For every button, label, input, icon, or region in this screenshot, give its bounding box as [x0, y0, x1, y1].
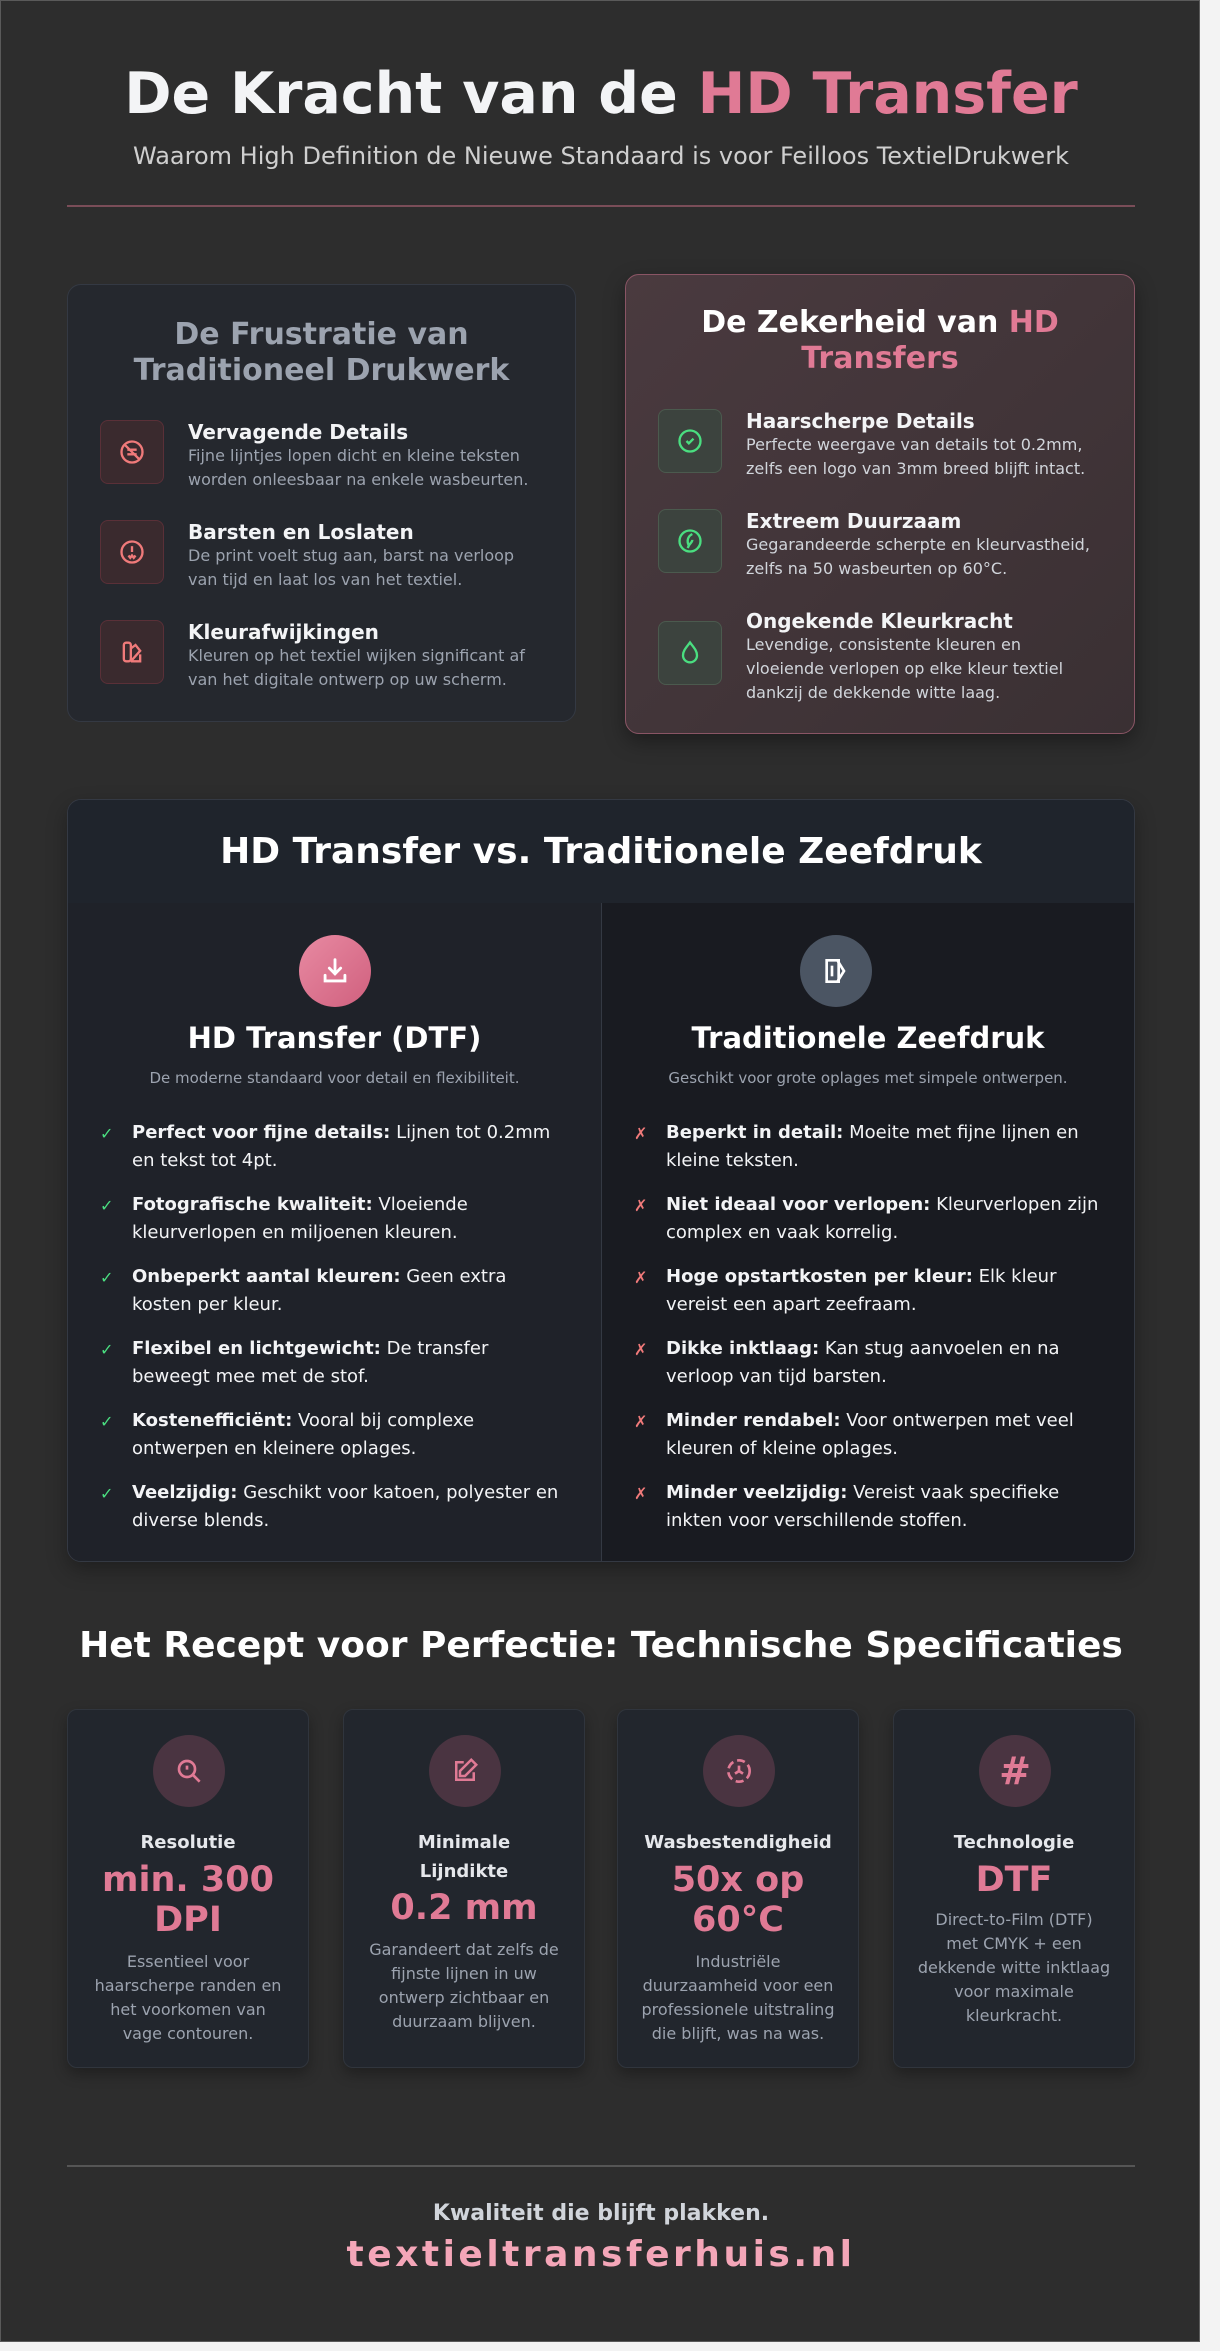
- spec card: resolutie: het voorkomen van: [110, 2000, 266, 2019]
- footer tagline: Kwaliteit die blijft plakken.: [433, 2201, 769, 2226]
- item: vervagende details: Fijne lijntjes lopen dicht en kleine teksten: [188, 446, 520, 465]
- spec card: resolutie: min. 300: [102, 1860, 274, 1900]
- item: barsten: [100, 520, 514, 589]
- cons list: Minder veelzijdig: Vereist vaak specifieke: [666, 1482, 1059, 1503]
- pros list: ontwerpen en kleinere oplages.: [132, 1438, 416, 1459]
- pros list: Flexibel en lichtgewicht: De transfer: [132, 1338, 488, 1359]
- cons list: [634, 1122, 1098, 1531]
- spec card: technologie: voor maximale: [954, 1982, 1074, 2001]
- pros list: Perfect voor fijne details: Lijnen tot 0.2mm: [132, 1122, 550, 1143]
- item: barsten: Barsten en Loslaten: [188, 520, 414, 544]
- comparison heading: [68, 800, 1134, 903]
- cons list: Niet ideaal voor verlopen: Kleurverlopen zijn: [666, 1194, 1098, 1215]
- item: duurzaam: zelfs na 50 wasbeurten op 60°C.: [746, 559, 1007, 578]
- pros list: ✓: [100, 1340, 113, 1359]
- spec card: wasbestendigheid: duurzaamheid voor een: [643, 1976, 833, 1995]
- pros list: [100, 1122, 558, 1531]
- pros list: Veelzijdig: Geschikt voor katoen, polyester en: [132, 1482, 558, 1503]
- cons list: complex en vaak korrelig.: [666, 1222, 898, 1243]
- column title: Traditionele Zeefdruk: [692, 1021, 1044, 1055]
- item: kleurkracht: Ongekende Kleurkracht: [746, 609, 1013, 633]
- item: haarscherp: Perfecte weergave van details tot 0.2mm,: [746, 435, 1082, 454]
- item: vervagende details: [100, 420, 528, 489]
- item: barsten: van tijd en laat los van het textiel.: [188, 570, 462, 589]
- cons list: vereist een apart zeefraam.: [666, 1294, 917, 1315]
- icon: wash cycle: [703, 1735, 775, 1807]
- item: duurzaam: Gegarandeerde scherpte en kleurvastheid,: [746, 535, 1090, 554]
- spec card: wasbestendigheid: professionele uitstraling: [642, 2000, 834, 2019]
- spec card: lijndikte: ontwerp zichtbaar en: [379, 1988, 549, 2007]
- spec card: wasbestendigheid: Wasbestendigheid: [644, 1832, 832, 1853]
- spec card: resolutie: Essentieel voor: [127, 1952, 249, 1971]
- column subtitle: Geschikt voor grote oplages met simpele ontwerpen.: [668, 1069, 1068, 1087]
- cons list: verloop van tijd barsten.: [666, 1366, 887, 1387]
- cons list: Minder rendabel: Voor ontwerpen met veel: [666, 1410, 1074, 1431]
- subtitle: Waarom High Definition de Nieuwe Standaard is voor Feilloos TextielDrukwerk: [133, 142, 1069, 170]
- footer url: textieltransferhuis.nl: [347, 2234, 855, 2275]
- item: kleurkracht: dankzij de dekkende witte laag.: [746, 683, 1000, 702]
- pros list: ✓: [100, 1124, 113, 1143]
- cons list: Dikke inktlaag: Kan stug aanvoelen en na: [666, 1338, 1060, 1359]
- title: De Kracht van de HD Transfer: [124, 61, 1078, 127]
- item: duurzaam: Extreem Duurzaam: [746, 509, 961, 533]
- panel: frustration: [67, 284, 576, 722]
- pros list: diverse blends.: [132, 1510, 269, 1531]
- spec card: lijndikte: Garandeert dat zelfs de: [369, 1940, 559, 1959]
- icon: pencil: [429, 1735, 501, 1807]
- spec card: lijndikte: duurzaam blijven.: [392, 2012, 536, 2031]
- pros list: ✓: [100, 1196, 113, 1215]
- panel heading: Traditioneel Drukwerk: [134, 353, 509, 388]
- item: haarscherp: zelfs een logo van 3mm breed blijft intact.: [746, 459, 1085, 478]
- item: haarscherp: [658, 409, 1085, 478]
- spec card: lijndikte: Lijndikte: [420, 1861, 508, 1882]
- item: kleurkracht: vloeiende verlopen op elke kleur textiel: [746, 659, 1063, 678]
- icon: drop: [658, 621, 722, 685]
- pros list: kosten per kleur.: [132, 1294, 282, 1315]
- comparison heading: HD Transfer vs. Traditionele Zeefdruk: [220, 831, 982, 872]
- icon: swatch: [100, 620, 164, 684]
- pros list: Onbeperkt aantal kleuren: Geen extra: [132, 1266, 506, 1287]
- icon: check circle: [658, 409, 722, 473]
- spec card: technologie: Technologie: [954, 1832, 1074, 1853]
- spec card: wasbestendigheid: die blijft, was na was.: [652, 2024, 824, 2043]
- cons list: ✗: [634, 1412, 647, 1431]
- pros list: Fotografische kwaliteit: Vloeiende: [132, 1194, 468, 1215]
- panel: certainty: [625, 274, 1135, 734]
- icon: leaf: [658, 509, 722, 573]
- spec card: technologie: Direct-to-Film (DTF): [935, 1910, 1093, 1929]
- spec card: technologie: [893, 1709, 1135, 2068]
- spec card: lijndikte: fijnste lijnen in uw: [391, 1964, 537, 1983]
- spec card: wasbestendigheid: [617, 1709, 859, 2068]
- specs heading: Het Recept voor Perfectie: Technische Specificaties: [79, 1625, 1123, 1666]
- spec card: lijndikte: 0.2 mm: [390, 1888, 538, 1928]
- item: kleurafwijkingen: Kleuren op het textiel wijken significant af: [188, 646, 525, 665]
- cons list: inkten voor verschillende stoffen.: [666, 1510, 967, 1531]
- item: kleurkracht: [658, 609, 1063, 702]
- panel heading: De Zekerheid van HD: [701, 305, 1059, 340]
- column: HD transfer: [68, 903, 601, 1561]
- spec card: lijndikte: [343, 1709, 585, 2068]
- cons list: ✗: [634, 1124, 647, 1143]
- column subtitle: De moderne standaard voor detail en flexibiliteit.: [150, 1069, 520, 1087]
- cons list: ✗: [634, 1484, 647, 1503]
- item: kleurkracht: Levendige, consistente kleuren en: [746, 635, 1021, 654]
- cons list: ✗: [634, 1268, 647, 1287]
- cons list: Beperkt in detail: Moeite met fijne lijnen en: [666, 1122, 1079, 1143]
- icon: hash: #: [999, 1749, 1031, 1793]
- spec card: resolutie: [67, 1709, 309, 2068]
- column: zeefdruk: [601, 903, 1134, 1561]
- panel: comparison: [67, 799, 1135, 1562]
- spec card: wasbestendigheid: 50x op: [672, 1860, 804, 1900]
- icon: crack: [100, 520, 164, 584]
- spec card: resolutie: DPI: [154, 1900, 222, 1940]
- pros list: ✓: [100, 1412, 113, 1431]
- cons list: ✗: [634, 1196, 647, 1215]
- icon: blurred: [100, 420, 164, 484]
- pros list: Kostenefficiënt: Vooral bij complexe: [132, 1410, 474, 1431]
- item: vervagende details: worden onleesbaar na enkele wasbeurten.: [188, 470, 528, 489]
- item: barsten: De print voelt stug aan, barst na verloop: [188, 546, 514, 565]
- pros list: kleurverlopen en miljoenen kleuren.: [132, 1222, 458, 1243]
- item: duurzaam: [658, 509, 1090, 578]
- panel heading: [701, 305, 1059, 376]
- spec card: wasbestendigheid: 60°C: [692, 1900, 784, 1940]
- spec card: technologie: DTF: [976, 1860, 1052, 1900]
- pros list: ✓: [100, 1268, 113, 1287]
- spec card: resolutie: Resolutie: [140, 1832, 236, 1853]
- icon: hash: [979, 1735, 1051, 1807]
- icon: magnifier: [153, 1735, 225, 1807]
- item: vervagende details: Vervagende Details: [188, 420, 408, 444]
- panel heading: De Frustratie van: [174, 317, 469, 352]
- item: haarscherp: Haarscherpe Details: [746, 409, 975, 433]
- cons list: Hoge opstartkosten per kleur: Elk kleur: [666, 1266, 1056, 1287]
- item: kleurafwijkingen: van het digitale ontwerp op uw scherm.: [188, 670, 507, 689]
- panel heading: Transfers: [801, 341, 959, 376]
- pros list: en tekst tot 4pt.: [132, 1150, 277, 1171]
- panel heading: [134, 317, 510, 388]
- spec card: wasbestendigheid: Industriële: [696, 1952, 780, 1971]
- cons list: ✗: [634, 1340, 647, 1359]
- item: kleurafwijkingen: [100, 620, 526, 689]
- spec card: lijndikte: Minimale: [418, 1832, 510, 1853]
- spec card: resolutie: vage contouren.: [123, 2024, 253, 2043]
- pros list: beweegt mee met de stof.: [132, 1366, 369, 1387]
- cons list: kleine teksten.: [666, 1150, 799, 1171]
- icon: download: [299, 935, 371, 1007]
- pros list: ✓: [100, 1484, 113, 1503]
- cons list: kleuren of kleine oplages.: [666, 1438, 898, 1459]
- column title: HD Transfer (DTF): [188, 1021, 481, 1055]
- spec card: resolutie: haarscherpe randen en: [95, 1976, 281, 1995]
- item: kleurafwijkingen: Kleurafwijkingen: [188, 620, 379, 644]
- icon: screen: [800, 935, 872, 1007]
- spec card: technologie: kleurkracht.: [966, 2006, 1062, 2025]
- spec card: technologie: met CMYK + een: [946, 1934, 1082, 1953]
- spec card: technologie: dekkende witte inktlaag: [918, 1958, 1110, 1977]
